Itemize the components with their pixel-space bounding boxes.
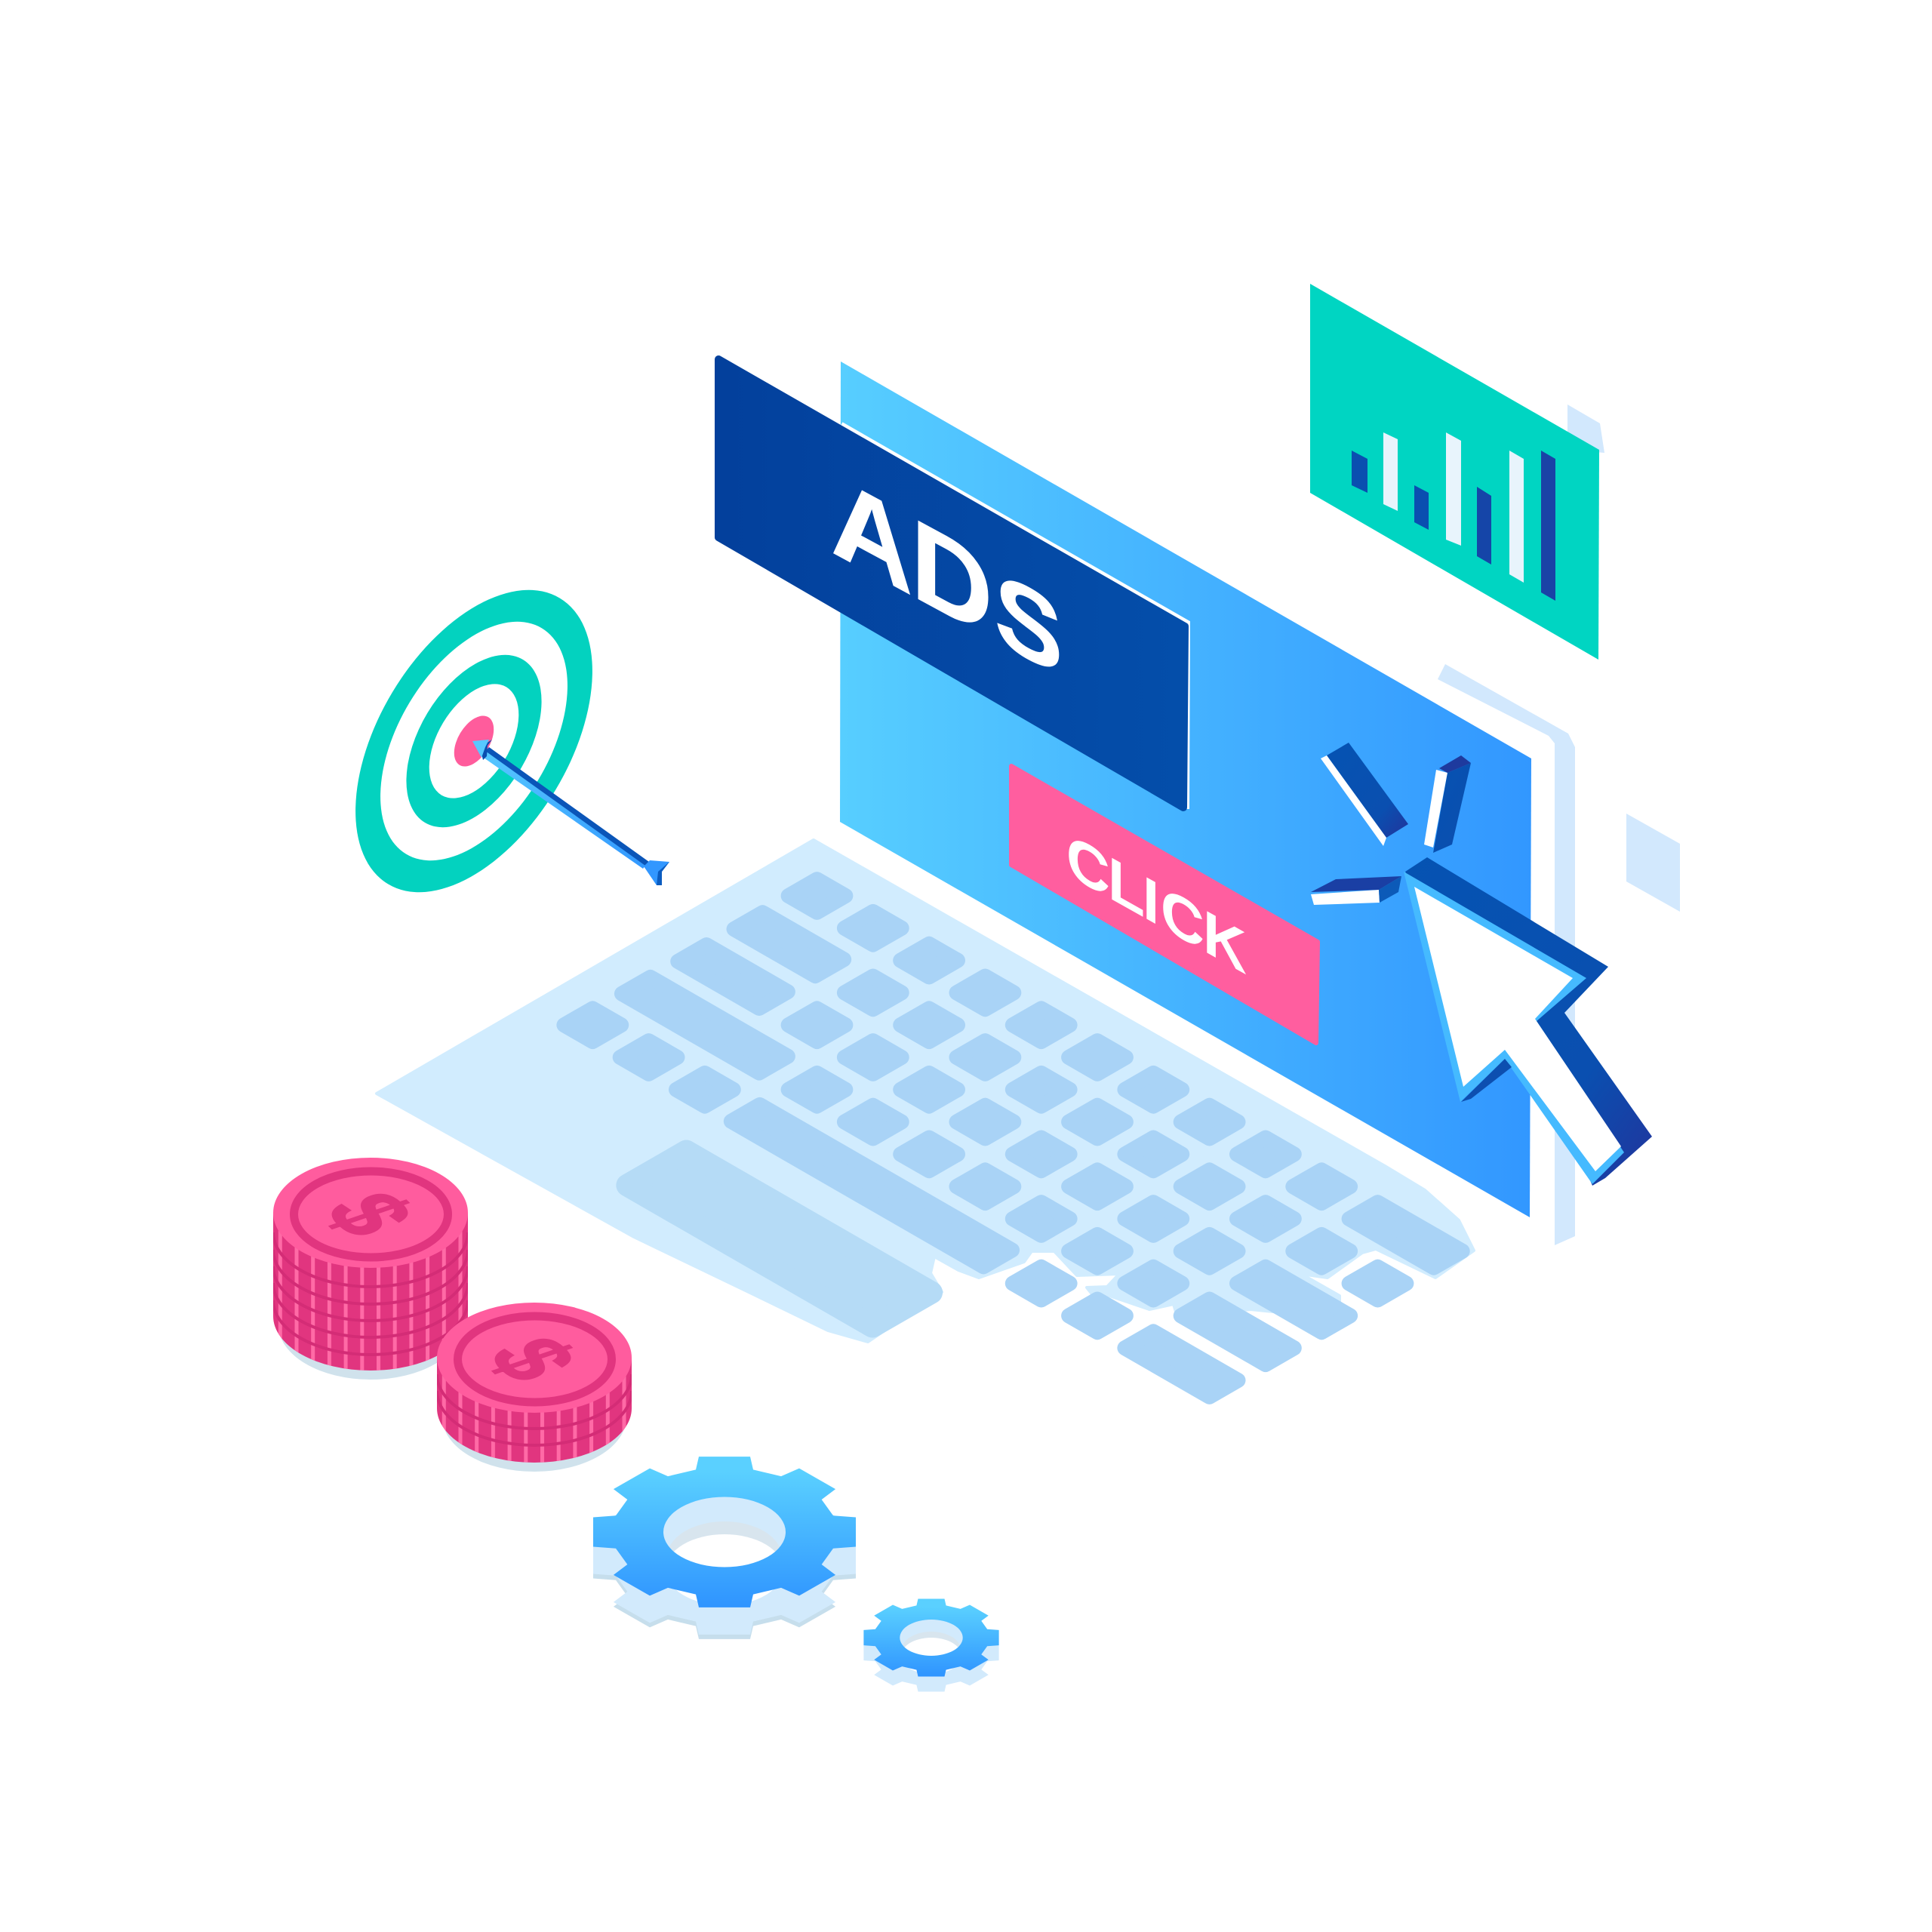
icon: cursor arrow xyxy=(1404,857,1652,1186)
bar chart xyxy=(1352,432,1555,601)
arrow xyxy=(472,740,669,885)
pale backdrop fragments xyxy=(1438,405,1680,1245)
icon: small gear xyxy=(863,1598,999,1692)
text: CLICK: CLICK xyxy=(1066,820,1247,988)
panel: ADS banner xyxy=(718,359,1188,809)
icon: click sparks xyxy=(1311,743,1471,905)
text: ADS: S xyxy=(995,548,1063,699)
dollar sign: $ xyxy=(464,1326,601,1392)
icon: large gear xyxy=(593,1457,856,1639)
keyboard keys xyxy=(564,879,1463,1397)
panel: bar chart card xyxy=(1310,284,1599,660)
trackpad xyxy=(627,1152,931,1327)
icon: coin stack large xyxy=(273,1158,468,1381)
dollar sign: $ xyxy=(301,1181,438,1247)
text: ADS: AD xyxy=(831,450,992,663)
panel: laptop screen xyxy=(840,361,1531,1217)
panel: CLICK button xyxy=(1011,766,1318,1043)
target rings xyxy=(306,549,641,933)
laptop keyboard xyxy=(377,840,1474,1397)
icon: coin stack small xyxy=(437,1303,632,1472)
icon: target with arrow xyxy=(306,549,669,933)
keyboard base xyxy=(377,840,1474,1342)
